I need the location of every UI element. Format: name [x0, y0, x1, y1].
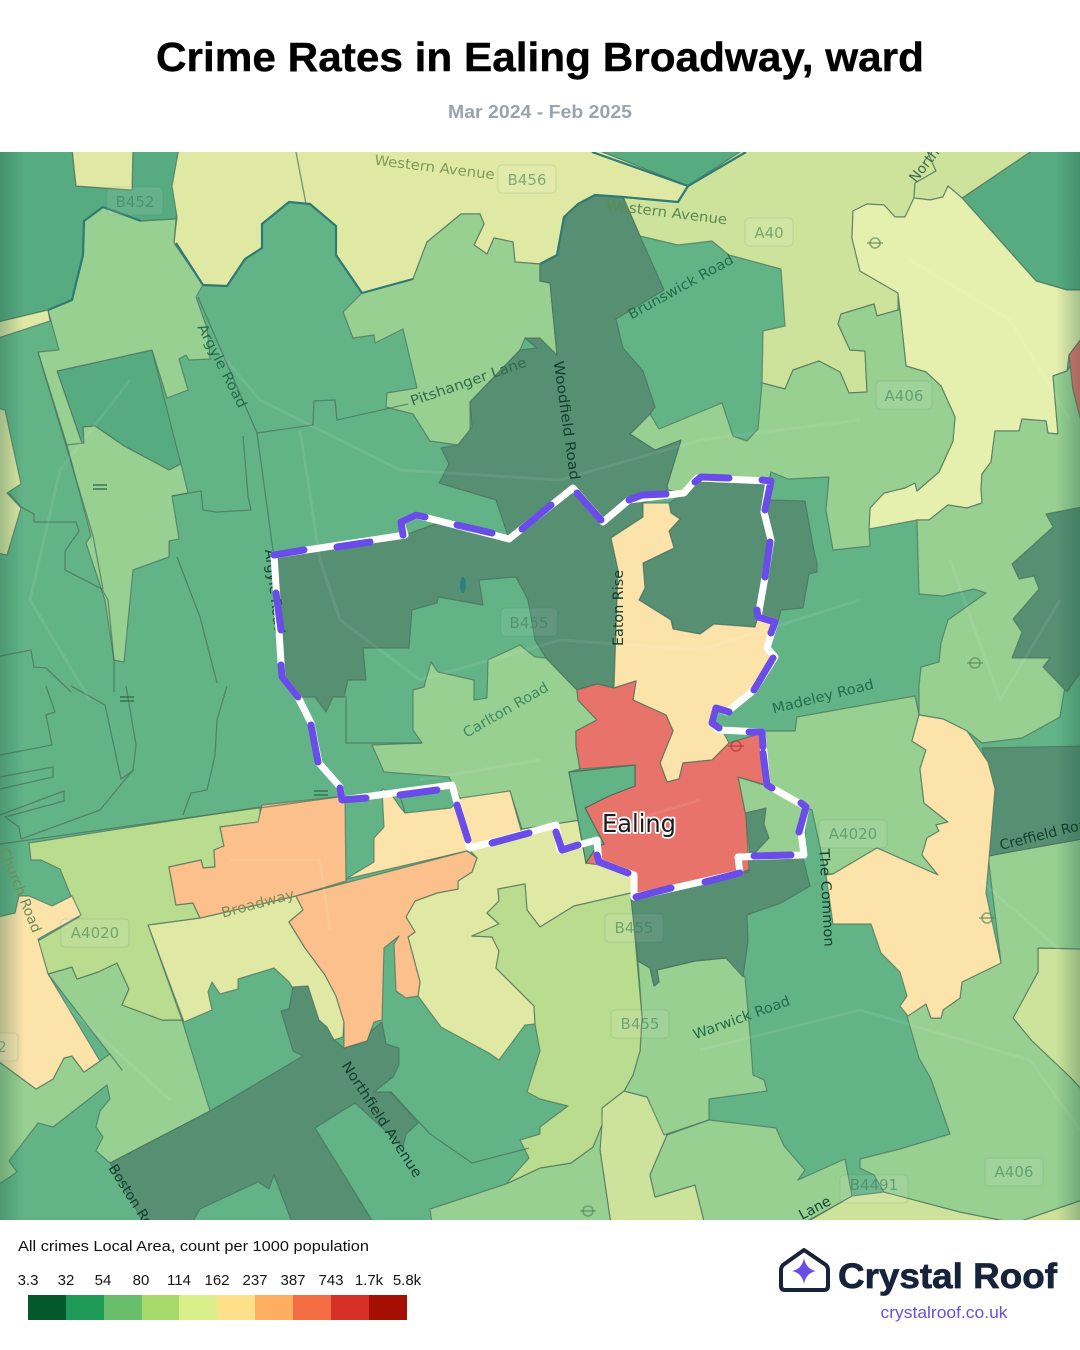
- road labels: Eaton Rise: [611, 570, 627, 646]
- legend: scale values: 5.8k: [393, 1272, 422, 1289]
- logo: Crystal Roof house icon: [781, 1250, 828, 1290]
- small green parcels: [0, 152, 529, 1163]
- road shields: A406: [885, 387, 923, 405]
- choropleth zones: darker green north-west: [0, 148, 1080, 470]
- title: Crime Rates in Ealing Broadway, ward: [156, 34, 924, 80]
- road shields: B455: [621, 1015, 659, 1033]
- choropleth zones: lime: [600, 148, 1080, 1225]
- road labels: Madeley Road: [771, 677, 875, 717]
- edge vignette: [0, 152, 1080, 1220]
- legend: scale values: 1.7k: [355, 1272, 384, 1289]
- road shields: A4020: [71, 924, 119, 942]
- road shields: A406: [995, 1163, 1033, 1181]
- legend: scale values: [18, 1272, 422, 1289]
- legend: scale values: 162: [204, 1272, 230, 1289]
- road labels: Western Avenue: [605, 198, 728, 228]
- subtitle: date range: Mar 2024 - Feb 2025: [448, 101, 632, 122]
- road shields: B452: [116, 193, 154, 211]
- legend title: All crimes Local Area, count per 1000 population: [18, 1238, 369, 1255]
- road labels: Pitshanger Lane: [408, 355, 529, 410]
- logo wordmark: Crystal Roof: [838, 1257, 1057, 1296]
- road shields: B456: [508, 171, 546, 189]
- choropleth zones: dark green low-crime areas: [110, 195, 1080, 1225]
- road shields: A4020: [829, 825, 877, 843]
- road labels: Warwick Road: [691, 993, 792, 1043]
- choropleth zones: lime-green west and south: [29, 807, 642, 1184]
- ward boundary: white outline: [274, 478, 806, 897]
- road shields: B4491: [850, 1176, 898, 1194]
- road labels: Western Avenue: [373, 153, 496, 183]
- choropleth zones: yellow-green: [0, 148, 688, 1060]
- place label: Ealing: Ealing: [602, 809, 676, 838]
- river: teal waterway outline: [48, 152, 746, 310]
- legend: scale values: 3.3: [18, 1272, 38, 1289]
- road labels: Argyle Road: [194, 322, 250, 411]
- road labels: North: [906, 145, 943, 186]
- legend: colour scale: [28, 1295, 407, 1320]
- road labels: Lane: [796, 1194, 834, 1224]
- road labels: Carlton Road: [460, 680, 552, 741]
- legend: scale values: 387: [280, 1272, 306, 1289]
- legend: scale values: 237: [242, 1272, 268, 1289]
- road shields: A40: [754, 224, 784, 242]
- choropleth zones: peach: [0, 503, 1001, 1089]
- road labels: Broadway: [220, 887, 296, 922]
- legend: scale values: 743: [318, 1272, 344, 1289]
- road labels: Woodfield Road: [550, 360, 582, 481]
- legend: scale values: 114: [167, 1272, 191, 1289]
- legend: scale values: 54: [95, 1272, 111, 1289]
- choropleth zones: light green: [0, 207, 1080, 1225]
- road labels: The Common: [815, 847, 837, 947]
- website link: crystalroof.co.uk: [880, 1304, 1008, 1322]
- legend: scale values: 32: [58, 1272, 74, 1289]
- pond marker: [460, 577, 466, 593]
- road labels: Brunswick Road: [626, 252, 737, 323]
- ward boundary: purple dashes: [274, 477, 806, 897]
- road labels: Northfield Avenue: [338, 1059, 425, 1181]
- green wedge beside Ealing: [569, 765, 635, 863]
- road shields: [0, 165, 1043, 1203]
- road shields: B455: [615, 919, 653, 937]
- road labels: Boston Road: [105, 1162, 165, 1245]
- road shields: B455: [510, 614, 548, 632]
- choropleth zones: orange: [169, 796, 477, 1048]
- road labels: Argyle Road: [261, 548, 287, 635]
- street network: [28, 337, 1061, 1039]
- choropleth zones: pale yellow north-east: [852, 186, 1080, 529]
- choropleth zones: red central Ealing: [576, 338, 1080, 897]
- tube station icons: [580, 238, 995, 1216]
- legend: scale values: 80: [133, 1272, 149, 1289]
- rail station icons: [93, 485, 328, 795]
